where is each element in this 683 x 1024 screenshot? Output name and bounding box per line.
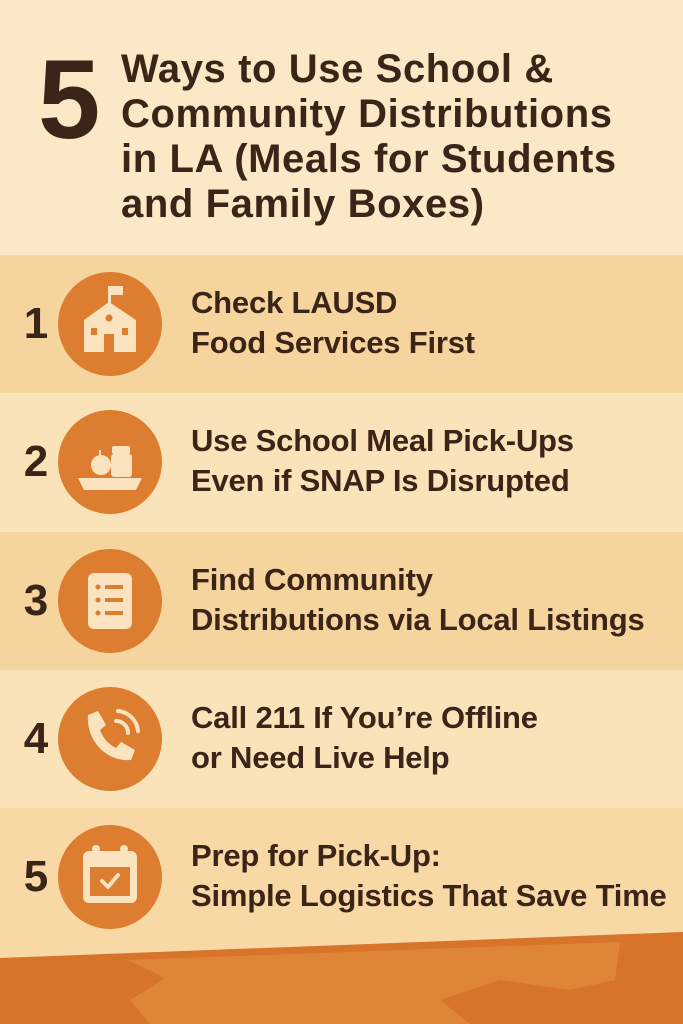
text 1: [191, 285, 475, 360]
header: [0, 0, 683, 255]
text 4: or Need Live Help: [191, 740, 449, 775]
row 5: [0, 808, 683, 958]
text 2: Even if SNAP Is Disrupted: [191, 463, 570, 498]
title: in LA (Meals for Students: [121, 137, 617, 181]
text 5: Simple Logistics That Save Time: [191, 878, 667, 913]
icon: calendar check: [58, 825, 162, 929]
number 4: 4: [24, 714, 48, 763]
icon: list: [58, 549, 162, 653]
text 2: Use School Meal Pick-Ups: [191, 423, 574, 458]
text 1: Food Services First: [191, 325, 475, 360]
text 4: [191, 700, 538, 775]
text 1: Check LAUSD: [191, 285, 397, 320]
number 3: 3: [24, 576, 48, 625]
title: and Family Boxes): [121, 182, 485, 226]
title: [121, 47, 617, 226]
row 4: [0, 670, 683, 809]
text 2: [191, 423, 574, 498]
big number 5: 5: [38, 37, 98, 162]
row 1: [0, 255, 683, 394]
title: Ways to Use School &: [121, 47, 554, 91]
text 3: [191, 562, 644, 637]
icon: meal tray: [58, 410, 162, 514]
icon: phone: [58, 687, 162, 791]
text 5: [191, 838, 667, 913]
title: Community Distributions: [121, 92, 613, 136]
row 3: [0, 532, 683, 671]
row 2: [0, 393, 683, 532]
number 2: 2: [24, 437, 48, 486]
number 5: 5: [24, 852, 48, 901]
text 3: Distributions via Local Listings: [191, 602, 644, 637]
text 3: Find Community: [191, 562, 433, 597]
text 4: Call 211 If You’re Offline: [191, 700, 538, 735]
text 5: Prep for Pick-Up:: [191, 838, 441, 873]
number 1: 1: [24, 299, 48, 348]
bottom decorative band: [0, 932, 683, 1024]
icon: school: [58, 272, 162, 376]
